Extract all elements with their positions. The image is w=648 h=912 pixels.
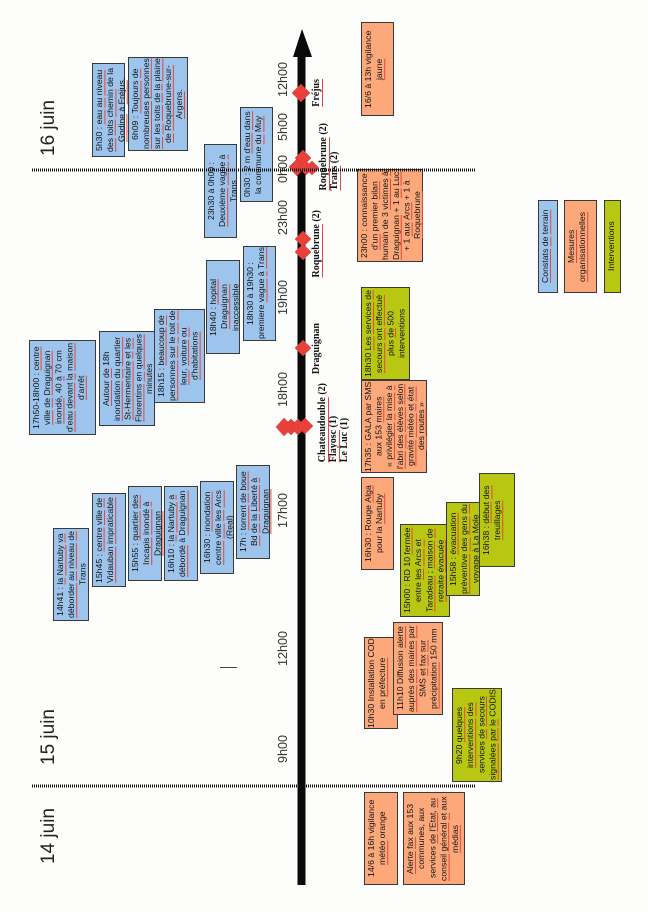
constat 0h30 — [240, 107, 273, 202]
constat autour de 18h — [99, 331, 155, 426]
constat 17h50: 17h50-18h00 : centre — [31, 346, 41, 429]
constat 0h30: 0h30 : 2 m d'eau dans — [242, 112, 252, 197]
legend: mesures organisationnelles — [564, 200, 597, 293]
place Draguignan: Draguignan — [311, 323, 322, 374]
constat 18h15: leur, voiture ou — [178, 327, 188, 385]
intervention 18h30 — [361, 287, 410, 380]
diamonds: events — [276, 84, 319, 436]
mesure 16/6: 16/6 à 13h vigilance — [363, 30, 373, 108]
mesure 17h35: des routes » — [416, 403, 426, 450]
constat 15h55: Draguignan — [152, 511, 162, 556]
constat 15h45: 15h45 : centre ville de — [94, 497, 104, 583]
constat autour de 18h: Autour de 18h — [101, 351, 111, 406]
time 0h00: 0h00 — [276, 155, 290, 183]
constat 17h: 17h : torrent de boue — [238, 472, 248, 552]
constat 14h41: déborder au niveau de — [66, 531, 76, 618]
constat 16h10 — [164, 486, 198, 581]
place Chateaudouble Flayosc Le Luc: Chateaudouble (2) — [317, 383, 328, 462]
place Chateaudouble Flayosc Le Luc: Le Luc (1) — [339, 418, 350, 462]
constat 16h10: débordé à Draguignan — [177, 490, 187, 577]
intervention 16h38 — [479, 473, 515, 567]
mesure 23h00: Roquebrune — [412, 192, 422, 239]
intervention 15h58: voyage à La Mole — [470, 515, 480, 583]
legend: mesures organisationnelles: Mesures — [566, 230, 576, 263]
mesure 10h30: en préfecture — [377, 657, 387, 709]
intervention 9h20: 9h20 quelques — [454, 706, 464, 764]
intervention 18h30: interventions — [397, 309, 407, 358]
intervention 15h58: préventive des gens du — [459, 504, 469, 594]
constat 14h41 — [53, 528, 89, 621]
intervention 9h20: services de secours — [476, 697, 486, 773]
intervention 15h00: 15h00 : RD 10 fermée — [402, 528, 412, 613]
place Chateaudouble Flayosc Le Luc: Flayosc (1) — [328, 416, 339, 462]
constat 17h50: d'arrêt — [76, 375, 86, 400]
constat autour de 18h: minutes — [144, 363, 154, 394]
mesure 23h00: + 1 aux Arcs + 1 à — [401, 180, 411, 251]
mesure 23h00 — [357, 169, 423, 262]
intervention 18h30: 18h30 Les services de — [363, 290, 373, 377]
mesure 17h35: « privilégier la mise à — [384, 386, 394, 467]
constat 17h: Bd de la Liberté à — [249, 478, 259, 546]
constat 6h09 — [128, 57, 188, 151]
mesure alerte fax: services de l'Etat, au — [427, 799, 437, 878]
constat 23h30 — [204, 144, 237, 238]
place Chateaudouble Flayosc Le Luc — [317, 383, 350, 462]
constat 5h30: 5h30 : eau au niveau — [94, 69, 104, 151]
mesure alerte fax — [403, 792, 465, 885]
date: 16 juin: 16 juin — [38, 100, 59, 156]
constat autour de 18h: inondation du quartier — [112, 336, 122, 421]
mesure alerte fax: Alerte fax aux 153 — [405, 803, 415, 874]
mesure 17h35: l'abri des élèves selon — [395, 384, 405, 469]
legend: interventions: Interventions — [606, 222, 616, 271]
place Roquebrune and Trans: Trans (2) — [329, 152, 340, 191]
constat 18h15: personnes sur le toit de — [167, 311, 177, 401]
constat 23h30: Trans — [228, 180, 238, 202]
mesure alerte fax: conseil général et aux — [439, 796, 449, 881]
mesure 16/6 — [361, 22, 394, 116]
intervention 18h30: secours ont effectué — [374, 294, 384, 373]
mesure 17h35 — [361, 380, 427, 473]
mesure alerte fax: communes, aux — [416, 808, 426, 869]
time 23h00: 23h00 — [276, 200, 290, 235]
mesure 11h10 — [393, 622, 443, 715]
constat 14h41: Trans — [77, 564, 87, 585]
mesure 11h10: auprès des maires par — [406, 625, 416, 712]
mesure 14/6: météo orange — [377, 812, 387, 865]
constat 6h09: nombreuses personnes — [141, 59, 151, 149]
mesure 11h10: précipitation 150 mm — [429, 628, 439, 709]
axis arrow — [293, 29, 312, 885]
constat 5h30: Godine à Fréjus. — [116, 78, 126, 142]
constat autour de 18h: St-Hermentaire et les — [123, 337, 133, 420]
constat 16h30 — [200, 481, 234, 574]
constat 17h50: inondé, 40 à 70 cm — [53, 351, 63, 424]
intervention 16h38: 16h38 : début des — [481, 485, 491, 555]
constat 17h: Draguignan — [260, 490, 270, 534]
legend: constats de terrain: Constats de terrain — [540, 210, 550, 283]
intervention 15h00: entre les Arcs et — [413, 539, 423, 602]
mesure 17h35: aux 153 maires — [374, 397, 384, 456]
mesure 16h30: pour la Nartuby — [374, 494, 384, 553]
constat 5h30 — [92, 63, 125, 157]
constat 17h — [236, 465, 270, 559]
constat 17h50 — [29, 340, 96, 435]
mesure 23h00: 23h00 : connaissance — [359, 173, 369, 258]
time 19h00: 19h00 — [276, 280, 290, 315]
constat 6h09: Argens. — [174, 89, 184, 119]
mesure 23h00: Draguignan + 1 au Luc — [391, 171, 401, 260]
date: 14 juin: 14 juin — [38, 808, 59, 864]
constat 5h30: des toits chemin de la — [105, 68, 115, 152]
legend: constats de terrain — [538, 200, 558, 293]
constat 0h30: la commune du Muy — [253, 115, 263, 194]
intervention 18h30: plus de 500 — [385, 311, 395, 356]
place Roquebrune and Trans — [318, 123, 341, 191]
constat 18h30: 18h30 à 19h30 : — [245, 262, 255, 325]
constat 6h09: de Roquebrune-sur- — [163, 65, 173, 143]
constat 18h30: premiere vague à Trans — [256, 248, 266, 339]
constat 18h40: 18h40 : hopital — [208, 278, 218, 336]
constat 6h09: sur les toits de la plaine — [152, 59, 162, 149]
mesure 14/6 — [364, 792, 398, 885]
intervention 9h20: interventions des — [465, 702, 475, 768]
place Roquebrune and Trans: Roquebrune (2) — [318, 123, 329, 191]
date: 15 juin: 15 juin — [38, 709, 59, 765]
panel: constats de terrain boxes — [29, 57, 276, 621]
legend: interventions — [604, 200, 621, 293]
constat 14h41: 14h41 : la Nartuby va — [55, 533, 65, 616]
panel: mesures and interventions boxes — [357, 22, 515, 885]
constat 23h30: 23h30 à 0h00 : — [206, 162, 216, 220]
intervention 9h20: signalées par le CODIS — [488, 690, 498, 780]
constat 18h40: inaccessible — [230, 283, 240, 331]
constat 6h09: 6h09 : Toujours de — [130, 68, 140, 140]
mesure 17h35: gravité météo et état — [405, 387, 415, 466]
constat 16h30: (Real) — [224, 516, 234, 539]
constat 15h55 — [128, 486, 162, 581]
place labels — [311, 79, 350, 462]
time 5h00: 5h00 — [276, 113, 290, 141]
tick mark: small dash — [220, 667, 237, 668]
constat 16h30: 16h30 : inondation — [202, 492, 212, 563]
time 17h00: 17h00 — [276, 493, 290, 528]
time 12h00: 12h00 — [276, 631, 290, 666]
intervention 16h38: treuillages — [492, 500, 502, 540]
mesure 17h35: 17h35 : GALA par SMS — [363, 381, 373, 472]
constat 15h45: Vidauban impraticable — [105, 497, 115, 583]
constat 18h40 — [206, 260, 240, 354]
mesure 16h30: 16h30 : Rouge Alga — [363, 485, 373, 562]
constat 15h55: 15h55 : quartier des — [130, 495, 140, 572]
mesure 10h30: 10h30 Installation COD — [366, 638, 376, 728]
mesure 23h00: d'un premier bilan — [370, 181, 380, 250]
mesure 11h10: SMS et fax sur — [417, 640, 427, 697]
constat 18h15 — [154, 309, 205, 403]
time 9h00: 9h00 — [276, 735, 290, 763]
place Fréjus: Fréjus — [311, 79, 322, 107]
intervention 15h58 — [446, 502, 480, 596]
constat 16h10: 16h10 : la Nartuby a — [166, 494, 176, 573]
mesure 23h00: humain de 3 victimes à — [380, 171, 390, 260]
legend: mesures organisationnelles: organisationnelles — [577, 211, 587, 282]
constat 16h30: centre ville les Arcs — [213, 490, 223, 565]
time 12h00: 12h00 — [276, 62, 290, 97]
mesure alerte fax: médias — [450, 824, 460, 853]
constat 17h50: ville de Draguignan — [42, 350, 52, 425]
time labels — [276, 62, 290, 763]
mesure 16h30 — [361, 477, 394, 570]
constat 15h45 — [92, 493, 126, 587]
constat 17h50: d'eau devant la maison — [65, 343, 75, 432]
intervention 15h00: Taradeau ; maison de — [424, 529, 434, 612]
intervention 9h20 — [452, 688, 502, 782]
mesure 14/6: 14/6 à 16h vigilance — [366, 800, 376, 877]
constat 18h15: d'habitations — [190, 332, 200, 380]
constat 18h15: 18h15 : beaucoup de — [156, 315, 166, 397]
intervention 15h00 — [400, 524, 450, 617]
constat 15h55: Incapis inondé à — [141, 502, 151, 565]
mesure 11h10: 11h10 Diffusion alerte — [395, 627, 405, 710]
intervention 15h58: 15h58 : évacuation — [448, 512, 458, 586]
intervention 15h00: retraite évacuée — [436, 539, 446, 602]
mesure 16/6: jaune — [374, 58, 384, 80]
constat 23h30: Deuxième vague à — [217, 155, 227, 227]
mesure 10h30 — [364, 637, 398, 729]
constat 18h30 — [243, 246, 276, 341]
legend — [538, 200, 621, 293]
constat autour de 18h: Florentins en quelques — [133, 335, 143, 422]
time 18h00: 18h00 — [276, 372, 290, 407]
constat 18h40: Draguignan — [219, 285, 229, 329]
place Roquebrune: Roquebrune (2) — [311, 210, 322, 278]
